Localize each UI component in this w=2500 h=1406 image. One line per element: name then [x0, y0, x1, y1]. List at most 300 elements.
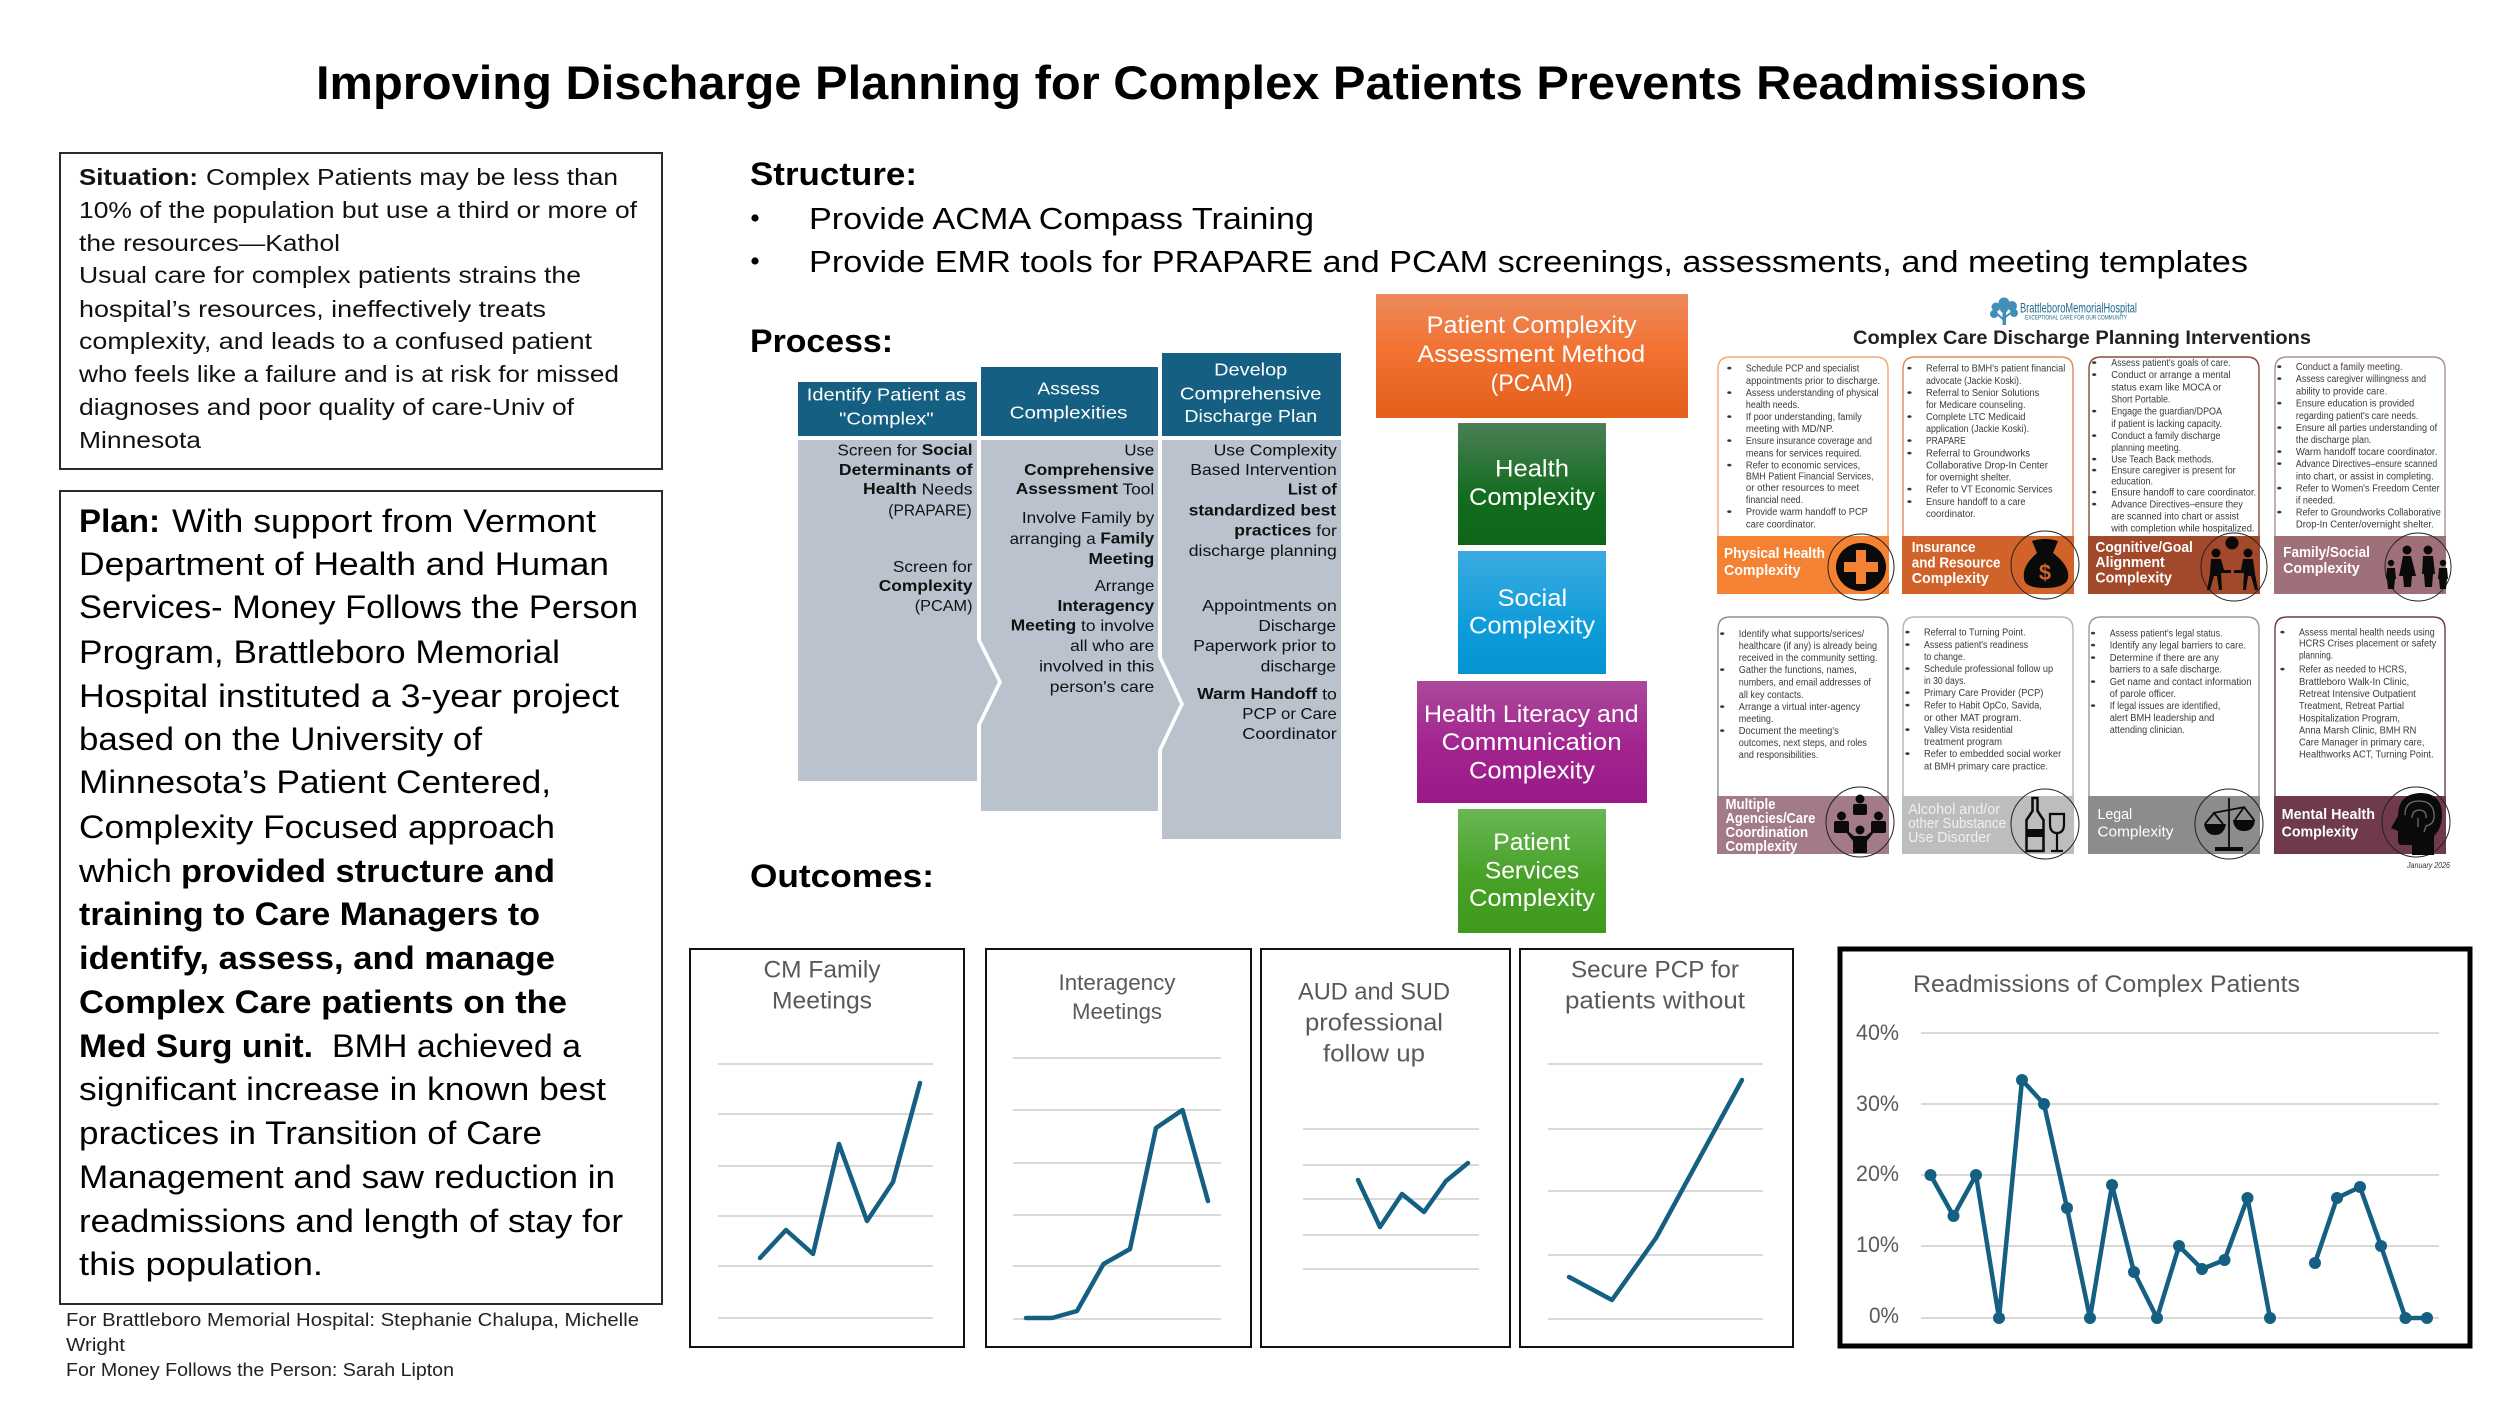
- panel: plan: this population.: [79, 1246, 323, 1282]
- card: multiple agencies/care coordination complexity: all key contacts.: [1739, 688, 1804, 700]
- icon: two people talking at a table: [2201, 533, 2267, 601]
- step 1: identify: (PCAM): [915, 598, 972, 615]
- card: physical health complexity: •: [1727, 386, 1732, 398]
- card: insurance and resource complexity: application (Jackie Koski).: [1926, 423, 2029, 434]
- chart: interagency meetings: [986, 949, 1251, 1347]
- card: cognitive/goal alignment complexity: •: [2091, 498, 2097, 510]
- step 2: assess: Arrange: [1095, 578, 1154, 595]
- card: insurance and resource complexity: •: [1907, 410, 1913, 422]
- card: legal complexity: Determine if there are any: [2110, 651, 2219, 663]
- card: alcohol and other substance use disorder: Refer to embedded social worker: [1924, 748, 2062, 759]
- card: mental health complexity: •: [2280, 663, 2286, 675]
- box: PCAM: [1376, 294, 1688, 418]
- card: insurance and resource complexity: Refer to VT Economic Services: [1926, 483, 2053, 495]
- step 1: identify: Determinants of: [839, 462, 973, 479]
- card: physical health complexity: Physical Health: [1724, 545, 1825, 562]
- card: legal complexity: barriers to a safe discharge.: [2110, 663, 2222, 675]
- card: legal complexity: If legal issues are identified,: [2110, 699, 2220, 711]
- card: family/social complexity: •: [2277, 421, 2282, 433]
- card: multiple agencies/care coordination complexity: Identify what supports/serices/: [1739, 628, 1864, 639]
- panel: situation: the resources—Kathol: [79, 230, 340, 256]
- card: physical health complexity: BMH Patient Financial Services,: [1746, 470, 1873, 482]
- card: alcohol and other substance use disorder: Use Disorder: [1908, 830, 1991, 846]
- card: physical health complexity: Ensure insurance coverage and: [1746, 435, 1872, 446]
- card: alcohol and other substance use disorder: to change.: [1924, 650, 1965, 662]
- card: insurance and resource complexity: Insurance: [1912, 540, 1976, 556]
- card: cognitive/goal alignment complexity: •: [2091, 405, 2097, 417]
- card: physical health complexity: •: [1727, 459, 1732, 471]
- step 3: develop plan: Based Intervention: [1190, 462, 1337, 479]
- card: cognitive/goal alignment complexity: with completion while hospitalized.: [2111, 522, 2255, 534]
- card: mental health complexity: Retreat Intensive Outpatient: [2299, 688, 2416, 699]
- card: family/social complexity: •: [2277, 506, 2282, 518]
- card: cognitive/goal alignment complexity: Conduct or arrange a mental: [2111, 369, 2231, 380]
- card: cognitive/goal alignment complexity: Complexity: [2095, 570, 2172, 586]
- card: physical health complexity: health needs.: [1746, 398, 1799, 410]
- acknowledgements: For Money Follows the Person: Sarah Lipton: [66, 1359, 454, 1380]
- stack labels: Health: [1495, 455, 1569, 482]
- card: multiple agencies/care coordination complexity: •: [1719, 725, 1725, 736]
- card: insurance and resource complexity: advocate (Jackie Koski).: [1926, 374, 2021, 386]
- card: mental health complexity: Hospitalization Program,: [2299, 712, 2400, 724]
- card: family/social complexity: the discharge plan.: [2296, 434, 2371, 445]
- card: insurance and resource complexity: •: [1907, 447, 1913, 459]
- step 3: develop plan: Appointments on: [1202, 598, 1337, 615]
- card: physical health complexity: •: [1727, 506, 1732, 517]
- card: cognitive/goal alignment complexity: •: [2091, 464, 2097, 476]
- card: mental health complexity: Refer as needed to HCRS,: [2299, 663, 2407, 675]
- card: cognitive/goal alignment complexity: Alignment: [2095, 555, 2165, 571]
- box: health complexity: [1458, 423, 1606, 545]
- card: family/social complexity: •: [2277, 482, 2282, 494]
- card: cognitive/goal alignment complexity: Short Portable.: [2111, 393, 2170, 405]
- card: multiple agencies/care coordination complexity: and responsibilities.: [1739, 749, 1818, 760]
- card: insurance and resource complexity: and Resource: [1912, 555, 2001, 571]
- icon: medical plus: [1828, 534, 1894, 600]
- card: family/social complexity: •: [2277, 361, 2282, 372]
- card: mental health complexity: planning.: [2299, 649, 2333, 661]
- card: cognitive/goal alignment complexity: if patient is lacking capacity.: [2111, 417, 2222, 429]
- step 3: develop plan: Discharge Plan: [1184, 406, 1317, 427]
- step 2: assess: all who are: [1070, 638, 1154, 655]
- card: cognitive/goal alignment complexity: •: [2091, 429, 2097, 441]
- card: multiple agencies/care coordination complexity: outcomes, next steps, and roles: [1739, 737, 1867, 748]
- structure bullet list: Provide EMR tools for PRAPARE and PCAM screenings, assessments, and meeting templates: [809, 244, 2248, 279]
- panel: plan: Services- Money Follows the Person: [79, 589, 638, 625]
- card: multiple agencies/care coordination complexity: Gather the functions, names,: [1739, 664, 1857, 675]
- card: insurance and resource complexity: for Medicare counseling.: [1926, 398, 2026, 410]
- card: alcohol and other substance use disorder: •: [1905, 638, 1911, 650]
- card: multiple agencies/care coordination complexity: Document the meeting's: [1739, 725, 1839, 736]
- step 2: assess: Involve Family by: [1022, 510, 1155, 527]
- step 2: assess: Assessment Tool: [1016, 482, 1154, 498]
- card: multiple agencies/care coordination complexity: meeting.: [1739, 713, 1773, 724]
- step 3: develop plan: [1162, 353, 1341, 839]
- card: insurance and resource complexity: Referral to BMH's patient financial: [1926, 362, 2065, 374]
- card: cognitive/goal alignment complexity: Ensure handoff to care coordinator.: [2111, 486, 2256, 498]
- chart: secure PCP for patients without: Secure PCP for: [1571, 956, 1739, 983]
- card: alcohol and other substance use disorder: [1902, 617, 2079, 859]
- card: cognitive/goal alignment complexity: •: [2091, 486, 2097, 498]
- icon: money bag: $: [2039, 560, 2051, 585]
- panel: plan: Complex Care patients on the: [79, 984, 567, 1020]
- stack labels: Services: [1485, 857, 1579, 884]
- card: multiple agencies/care coordination complexity: •: [1719, 628, 1725, 639]
- stack labels: Complexity: [1469, 885, 1595, 912]
- card: mental health complexity: •: [2280, 626, 2286, 638]
- icon: money bag: [2011, 531, 2079, 599]
- card: insurance and resource complexity: Collaborative Drop-In Center: [1926, 459, 2048, 471]
- card: physical health complexity: Assess understanding of physical: [1746, 386, 1879, 398]
- step 2: assess: Use: [1124, 443, 1154, 459]
- panel: plan: [60, 491, 662, 1304]
- panel: situation: Usual care for complex patients strains the: [79, 262, 581, 288]
- step 2: assess: Assess: [1037, 379, 1100, 399]
- icon: bottle and wine glass: [2011, 789, 2079, 859]
- card: legal complexity: [2088, 617, 2263, 859]
- card: multiple agencies/care coordination complexity: numbers, and email addresses of: [1739, 676, 1871, 688]
- card: legal complexity: •: [2090, 639, 2096, 651]
- card: multiple agencies/care coordination complexity: [1717, 617, 1894, 857]
- card: family/social complexity: Conduct a family meeting.: [2296, 361, 2403, 372]
- chart: secure PCP for patients without: [1520, 949, 1793, 1347]
- chart: secure PCP for patients without: patients without: [1565, 987, 1745, 1014]
- card: alcohol and other substance use disorder: •: [1905, 687, 1911, 698]
- stack labels: Social: [1497, 585, 1567, 611]
- process chevron diagram: [798, 353, 1341, 839]
- card: insurance and resource complexity: •: [1907, 483, 1913, 495]
- card: cognitive/goal alignment complexity: •: [2091, 453, 2097, 465]
- card: insurance and resource complexity: Referral to Groundworks: [1926, 447, 2030, 459]
- card: legal complexity: •: [2090, 627, 2096, 639]
- chart title: Readmissions of Complex Patients: [1913, 971, 2300, 998]
- panel: plan: BMH achieved a: [332, 1028, 581, 1064]
- acknowledgements: [66, 1309, 639, 1380]
- heading: structure: Structure:: [750, 156, 917, 192]
- stack labels: [1417, 312, 1645, 912]
- acknowledgements: Wright: [66, 1334, 125, 1355]
- hospital logo: EXCEPTIONAL CARE FOR OUR COMMUNITY: [2025, 314, 2127, 322]
- box: patient services complexity: [1458, 809, 1606, 933]
- panel: plan: identify, assess, and manage: [79, 940, 555, 976]
- card: insurance and resource complexity: [1902, 357, 2079, 599]
- step 3: develop plan: practices for: [1234, 523, 1337, 540]
- card: physical health complexity: Provide warm handoff to PCP: [1746, 506, 1868, 517]
- card: legal complexity: Identify any legal barriers to care.: [2110, 639, 2246, 651]
- y axis labels: 10%: [1856, 1232, 1899, 1257]
- stack labels: Patient Complexity: [1427, 312, 1637, 339]
- step 3: develop plan: Develop: [1214, 360, 1287, 380]
- stack labels: Assessment Method: [1417, 341, 1645, 367]
- panel: plan: practices in Transition of Care: [79, 1115, 542, 1151]
- line series: [1924, 1074, 2433, 1324]
- card: physical health complexity: Schedule PCP and specialist: [1746, 362, 1859, 374]
- hospital logo: BrattleboroMemorialHospital: [2020, 300, 2137, 316]
- card: alcohol and other substance use disorder: Primary Care Provider (PCP): [1924, 687, 2043, 698]
- step 3: develop plan: Use Complexity: [1214, 443, 1338, 459]
- panel: plan: readmissions and length of stay for: [79, 1203, 623, 1239]
- stack labels: Complexity: [1469, 757, 1595, 784]
- panel: plan: significant increase in known best: [79, 1071, 606, 1107]
- card: physical health complexity: or other resources to meet: [1746, 482, 1859, 493]
- stack labels: Complexity: [1469, 484, 1595, 511]
- panel: plan: provided structure and: [181, 853, 555, 889]
- step 2: assess: Complexities: [1010, 403, 1127, 423]
- card: legal complexity: Legal: [2097, 806, 2132, 823]
- card: family/social complexity: •: [2277, 397, 2282, 409]
- step 2: assess: arranging a Family: [1010, 531, 1155, 548]
- card: cognitive/goal alignment complexity: Cognitive/Goal: [2095, 539, 2193, 556]
- card: multiple agencies/care coordination complexity: Arrange a virtual inter-agency: [1739, 700, 1860, 712]
- panel: plan: Minnesota’s Patient Centered,: [79, 764, 551, 800]
- step 2: assess: Meeting: [1088, 551, 1154, 568]
- card: insurance and resource complexity: •: [1907, 362, 1913, 374]
- card: physical health complexity: •: [1727, 410, 1732, 422]
- card: family/social complexity: ability to provide care.: [2296, 385, 2387, 397]
- card: physical health complexity: care coordinator.: [1746, 518, 1816, 530]
- step 3: develop plan: Discharge: [1258, 618, 1336, 635]
- step 1: identify: (PRAPARE): [888, 503, 972, 519]
- chart: AUD and SUD professional follow up: professional: [1305, 1009, 1443, 1036]
- icon: care team: [1826, 787, 1894, 857]
- step 2: assess: Comprehensive: [1024, 462, 1154, 479]
- y axis labels: 0%: [1869, 1303, 1899, 1328]
- card: alcohol and other substance use disorder: treatment program: [1924, 736, 2002, 747]
- card: insurance and resource complexity: Complete LTC Medicaid: [1926, 410, 2026, 422]
- card: alcohol and other substance use disorder: Valley Vista residential: [1924, 723, 2013, 735]
- card: family/social complexity: Ensure education is provided: [2296, 397, 2414, 409]
- panel: plan: training to Care Managers to: [79, 896, 540, 932]
- step 3: develop plan: standardized best: [1189, 503, 1337, 519]
- card: multiple agencies/care coordination complexity: Complexity: [1726, 838, 1798, 855]
- card: insurance and resource complexity: PRAPARE: [1926, 435, 1966, 446]
- panel: situation: complexity, and leads to a confused patient: [79, 328, 593, 354]
- card: alcohol and other substance use disorder: Referral to Turning Point.: [1924, 626, 2026, 638]
- step 2: assess: involved in this: [1039, 659, 1154, 675]
- chart: CM family meetings: CM Family: [764, 956, 880, 983]
- card: mental health complexity: Brattleboro Walk-In Clinic,: [2299, 675, 2409, 687]
- card: mental health complexity: [2274, 617, 2450, 857]
- card: cognitive/goal alignment complexity: •: [2091, 357, 2097, 368]
- step 2: assess: [981, 367, 1180, 811]
- card: insurance and resource complexity: coordinator.: [1926, 508, 1976, 519]
- card: family/social complexity: •: [2277, 373, 2282, 384]
- card: multiple agencies/care coordination complexity: Multiple: [1726, 796, 1776, 813]
- panel: plan: based on the University of: [79, 721, 482, 757]
- chart: interagency meetings: Meetings: [1072, 999, 1162, 1024]
- card: alcohol and other substance use disorder: other Substance: [1908, 816, 2006, 832]
- y axis labels: 20%: [1856, 1161, 1899, 1186]
- step 1: identify: "Complex": [839, 409, 934, 429]
- step 3: develop plan: discharge: [1261, 659, 1336, 675]
- step 3: develop plan: PCP or Care: [1242, 706, 1337, 723]
- card: family/social complexity: •: [2277, 458, 2282, 469]
- card: family/social complexity: •: [2277, 446, 2282, 457]
- card: legal complexity: •: [2090, 699, 2096, 711]
- panel: plan: Plan:: [79, 503, 160, 539]
- card: mental health complexity: Mental Health: [2282, 806, 2375, 823]
- card: alcohol and other substance use disorder: in 30 days.: [1924, 675, 1966, 686]
- card: cognitive/goal alignment complexity: Engage the guardian/DPOA: [2111, 405, 2223, 417]
- card: alcohol and other substance use disorder: •: [1905, 748, 1911, 759]
- title: Improving Discharge Planning for Complex Patients Prevents Readmissions: [316, 56, 2087, 109]
- panel: situation: Situation:: [79, 164, 198, 190]
- card: alcohol and other substance use disorder: •: [1905, 699, 1911, 711]
- card: physical health complexity: financial need.: [1746, 494, 1803, 505]
- panel: plan: Management and saw reduction in: [79, 1159, 615, 1195]
- card: alcohol and other substance use disorder: Schedule professional follow up: [1924, 663, 2053, 674]
- card: family/social complexity: Complexity: [2283, 561, 2360, 577]
- card: multiple agencies/care coordination complexity: received in the community setting.: [1739, 652, 1878, 663]
- structure bullet list: Provide ACMA Compass Training: [809, 201, 1314, 236]
- card: physical health complexity: Complexity: [1724, 562, 1801, 579]
- stack labels: (PCAM): [1491, 370, 1573, 396]
- panel: plan: Program, Brattleboro Memorial: [79, 634, 560, 670]
- step 1: identify: Screen for: [893, 559, 973, 576]
- structure bullet list: [751, 201, 2248, 279]
- step 3: develop plan: discharge planning: [1189, 543, 1337, 560]
- icon: head with brain: [2382, 787, 2450, 857]
- card: legal complexity: Get name and contact information: [2110, 676, 2252, 687]
- y axis labels: [1856, 1020, 1899, 1328]
- card: alcohol and other substance use disorder: or other MAT program.: [1924, 711, 2021, 723]
- step 1: identify: Screen for Social: [837, 443, 972, 459]
- card: family/social complexity: Family/Social: [2283, 545, 2370, 561]
- interventions sheet: [1717, 298, 2451, 870]
- card: physical health complexity: meeting with MD/NP.: [1746, 423, 1834, 434]
- step 3: develop plan: Coordinator: [1242, 726, 1337, 743]
- heading: outcomes: Outcomes:: [750, 858, 934, 894]
- chart: AUD and SUD professional follow up: AUD and SUD: [1298, 978, 1450, 1005]
- card: mental health complexity: Anna Marsh Clinic, BMH RN: [2299, 724, 2416, 736]
- step 3: develop plan: Warm Handoff to: [1197, 687, 1337, 703]
- panel: plan: Med Surg unit.: [79, 1028, 313, 1064]
- box: social complexity: [1458, 551, 1606, 674]
- step 1: identify: Complexity: [879, 578, 973, 595]
- card: insurance and resource complexity: •: [1907, 435, 1913, 446]
- card: physical health complexity: If poor understanding, family: [1746, 410, 1862, 422]
- card: alcohol and other substance use disorder: •: [1905, 723, 1911, 735]
- step 1: identify: Health Needs: [863, 482, 972, 498]
- card: physical health complexity: means for services required.: [1746, 447, 1862, 459]
- card: alcohol and other substance use disorder: Refer to Habit OpCo, Savida,: [1924, 699, 2042, 711]
- card: mental health complexity: Complexity: [2282, 824, 2358, 840]
- card: cognitive/goal alignment complexity: Use Teach Back methods.: [2111, 453, 2214, 465]
- step 1: identify: Identify Patient as: [807, 385, 966, 405]
- step 3: develop plan: Paperwork prior to: [1193, 638, 1336, 655]
- card: insurance and resource complexity: for overnight shelter.: [1926, 471, 2011, 483]
- chart: CM family meetings: [690, 949, 964, 1347]
- panel: plan: Hospital instituted a 3-year project: [79, 678, 619, 714]
- card: cognitive/goal alignment complexity: Assess patient's goals of care.: [2111, 357, 2231, 368]
- panel: plan: With support from Vermont: [172, 503, 596, 539]
- icon: family: [2385, 533, 2451, 601]
- panel: situation: diagnoses and poor quality of care-Univ of: [79, 394, 575, 420]
- y axis labels: 40%: [1856, 1020, 1899, 1045]
- card: family/social complexity: [2274, 357, 2451, 601]
- card: cognitive/goal alignment complexity: •: [2091, 369, 2097, 380]
- step 2: assess: Interagency: [1057, 598, 1155, 615]
- stack labels: Health Literacy and: [1424, 701, 1639, 728]
- card: family/social complexity: if needed.: [2296, 494, 2335, 506]
- stack labels: Communication: [1442, 729, 1622, 756]
- panel: plan: which: [78, 853, 172, 889]
- step 3: develop plan: List of: [1288, 482, 1337, 498]
- chart: AUD and SUD professional follow up: [1261, 949, 1510, 1347]
- card: legal complexity: •: [2090, 651, 2096, 663]
- sheet title: Complex Care Discharge Planning Interventions: [1853, 328, 2311, 349]
- panel: situation: Minnesota: [79, 427, 201, 453]
- card: insurance and resource complexity: Complexity: [1912, 570, 1989, 587]
- card: alcohol and other substance use disorder: Assess patient's readiness: [1924, 638, 2028, 650]
- card: legal complexity: alert BMH leadership and: [2110, 711, 2214, 723]
- card: physical health complexity: •: [1727, 362, 1732, 374]
- step 3: develop plan: Comprehensive: [1180, 384, 1322, 404]
- stack labels: Complexity: [1469, 612, 1595, 639]
- PCAM complexity stack: [1376, 294, 1688, 933]
- card: legal complexity: attending clinician.: [2110, 724, 2185, 735]
- card: insurance and resource complexity: •: [1907, 386, 1913, 398]
- card: alcohol and other substance use disorder: at BMH primary care practice.: [1924, 760, 2048, 772]
- card: insurance and resource complexity: Referral to Senior Solutions: [1926, 386, 2039, 398]
- card: physical health complexity: [1717, 357, 1894, 600]
- card: legal complexity: Complexity: [2097, 824, 2174, 840]
- card: alcohol and other substance use disorder: •: [1905, 663, 1911, 674]
- card: legal complexity: •: [2090, 676, 2096, 687]
- card: legal complexity: Assess patient's legal status.: [2110, 627, 2222, 639]
- acknowledgements: For Brattleboro Memorial Hospital: Stephanie Chalupa, Michelle: [66, 1309, 639, 1330]
- card: physical health complexity: •: [1727, 435, 1732, 446]
- card: cognitive/goal alignment complexity: [2088, 357, 2267, 601]
- step 2: assess: Meeting to involve: [1011, 618, 1154, 635]
- card: multiple agencies/care coordination complexity: Coordination: [1726, 824, 1808, 841]
- panel: situation: hospital’s resources, ineffectively treats: [79, 296, 546, 322]
- panel: situation: [60, 153, 662, 469]
- icon: scales of justice: [2195, 789, 2263, 859]
- step 2: assess: person's care: [1050, 679, 1154, 696]
- card: alcohol and other substance use disorder: •: [1905, 626, 1911, 638]
- card: insurance and resource complexity: •: [1907, 496, 1913, 507]
- card: cognitive/goal alignment complexity: are scanned into chart or assist: [2111, 510, 2239, 522]
- card: multiple agencies/care coordination complexity: Agencies/Care: [1726, 810, 1815, 827]
- chart: readmissions of complex patients: [1840, 949, 2470, 1346]
- card: alcohol and other substance use disorder: Alcohol and/or: [1908, 802, 2000, 818]
- card: multiple agencies/care coordination complexity: •: [1719, 664, 1725, 675]
- card: multiple agencies/care coordination complexity: •: [1719, 700, 1725, 712]
- heading: process: Process:: [750, 323, 893, 359]
- card: cognitive/goal alignment complexity: planning meeting.: [2111, 442, 2181, 453]
- card: cognitive/goal alignment complexity: status exam like MOCA or: [2111, 381, 2222, 393]
- panel: plan: Complexity Focused approach: [79, 809, 555, 845]
- card: insurance and resource complexity: Ensure handoff to a care: [1926, 496, 2026, 507]
- card: physical health complexity: Refer to economic services,: [1746, 459, 1860, 471]
- chart: interagency meetings: Interagency: [1058, 970, 1176, 995]
- box: health literacy and communication complexity: [1417, 681, 1647, 803]
- step 1: identify: [798, 382, 998, 781]
- card: cognitive/goal alignment complexity: Advance Directives–ensure they: [2111, 498, 2243, 510]
- card: legal complexity: of parole officer.: [2110, 688, 2176, 699]
- card: multiple agencies/care coordination complexity: healthcare (if any) is already being: [1739, 640, 1877, 651]
- panel: plan: Department of Health and Human: [79, 546, 609, 582]
- card: cognitive/goal alignment complexity: education.: [2111, 475, 2153, 487]
- chart: AUD and SUD professional follow up: follow up: [1323, 1040, 1425, 1067]
- card: cognitive/goal alignment complexity: Ensure caregiver is present for: [2111, 464, 2236, 476]
- card: physical health complexity: appointments prior to discharge.: [1746, 374, 1880, 386]
- hospital logo: [1990, 298, 2137, 325]
- stack labels: Patient: [1493, 829, 1570, 856]
- card: cognitive/goal alignment complexity: Conduct a family discharge: [2111, 429, 2220, 441]
- panel: situation: who feels like a failure and is at risk for missed: [78, 361, 619, 387]
